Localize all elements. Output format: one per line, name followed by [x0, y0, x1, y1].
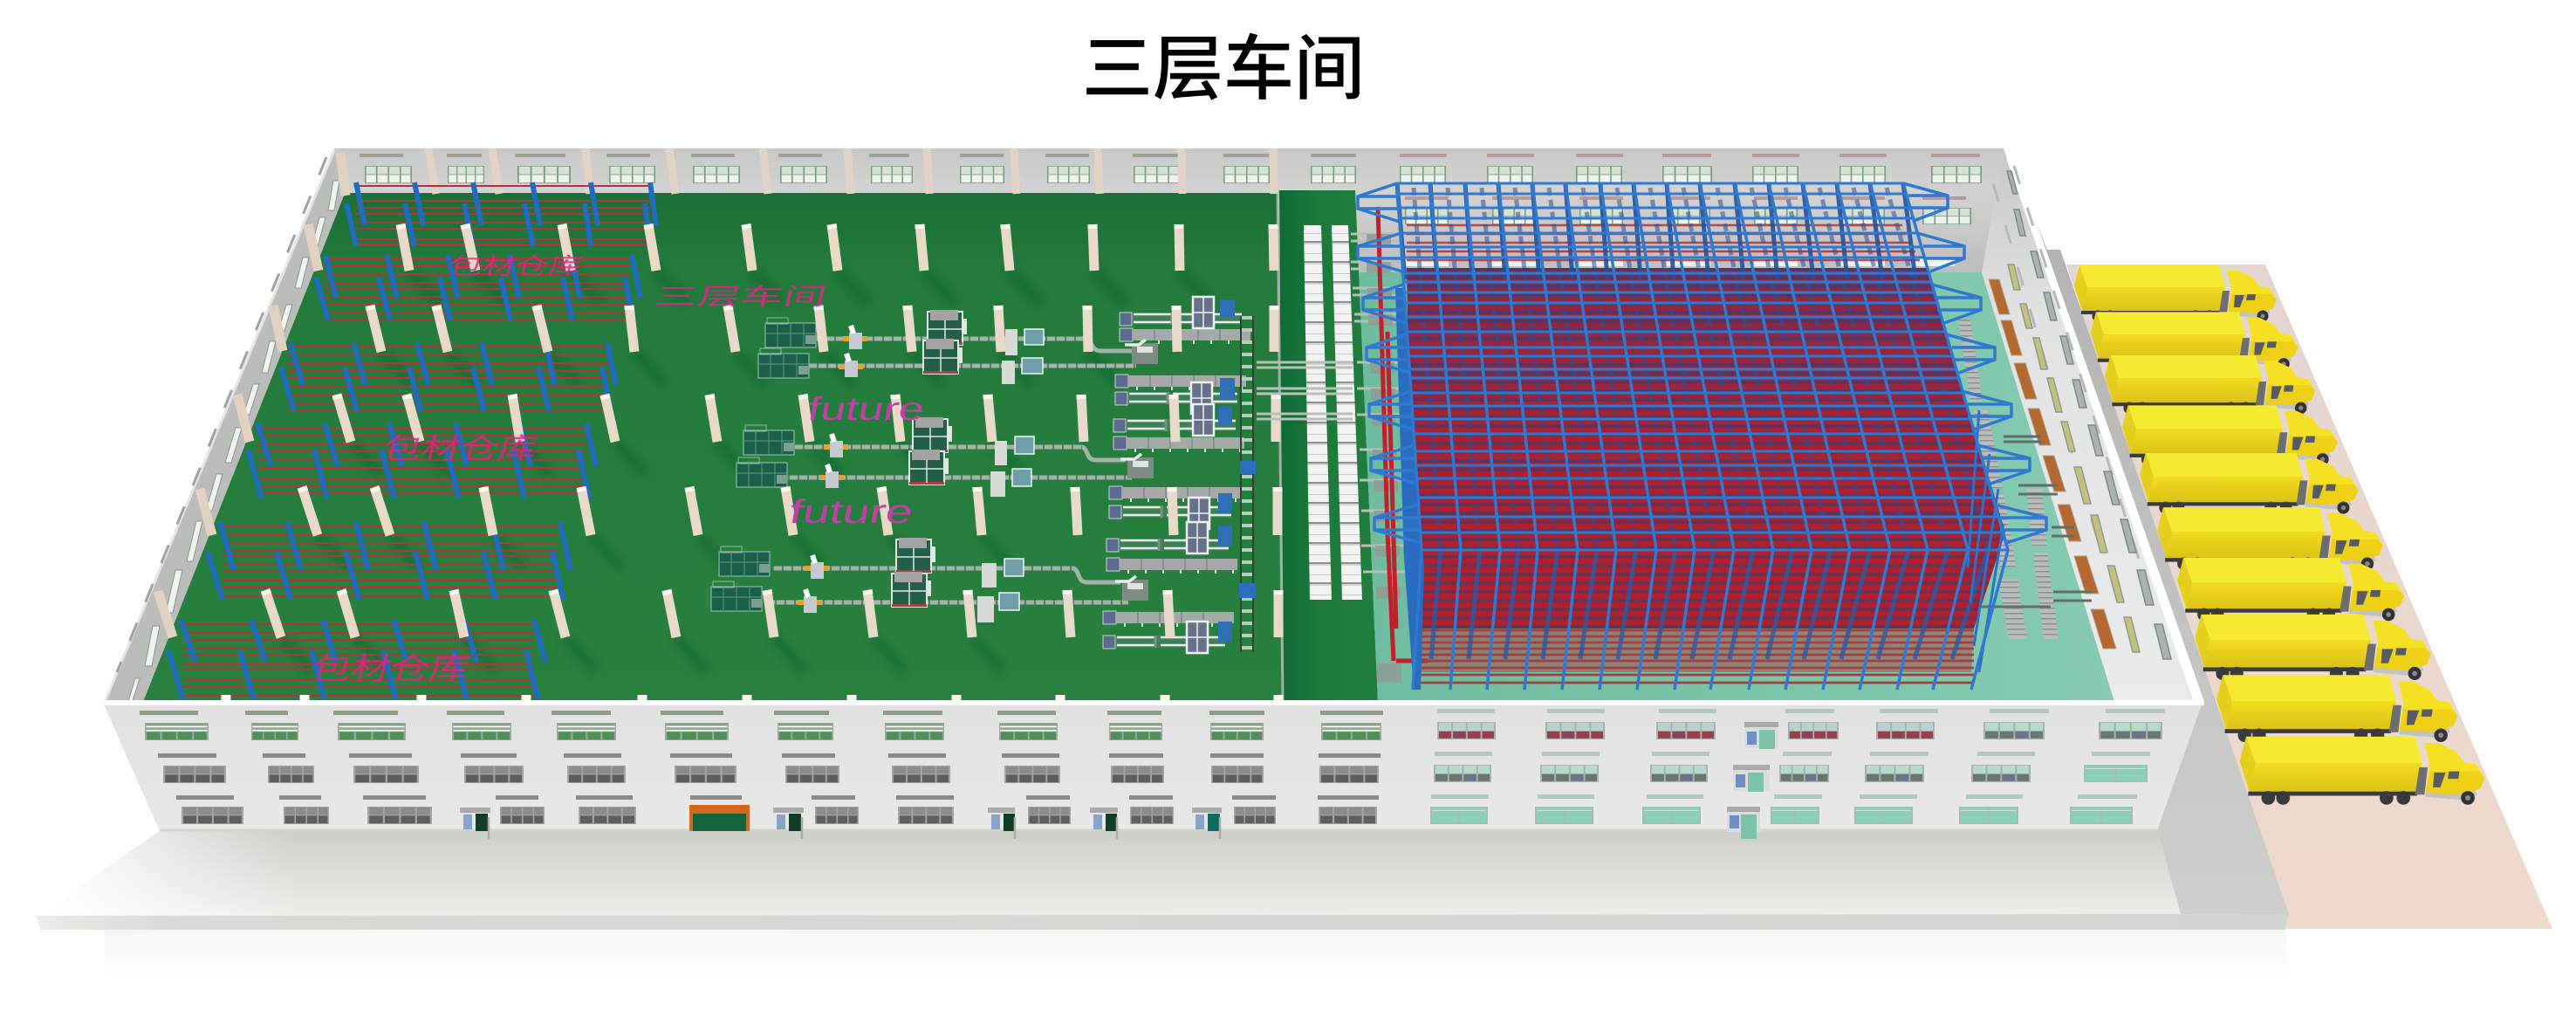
rack group E: [208, 522, 571, 600]
right wall windows (gray column): [2007, 171, 2171, 659]
transom windows: [140, 711, 1383, 715]
entrance doors, stair tower: [1727, 722, 1778, 839]
orange roller door: [689, 805, 750, 831]
truck 4: [2122, 405, 2338, 465]
entrance doors, ground floor: [460, 808, 1222, 839]
right-side teal floor conveyors: [1958, 319, 2092, 639]
rack group A: [346, 182, 656, 246]
floor label: 包材仓库 3: 包材仓库: [308, 651, 473, 686]
rack uprights: [1397, 183, 2008, 690]
left wall: [104, 150, 346, 705]
floor label: 三层车间: 三层车间: [653, 284, 829, 310]
upper floor windows row 1: [145, 722, 2162, 740]
truck 5: [2140, 453, 2359, 514]
right side wing brackets: [1903, 183, 2046, 543]
production line group 3: [711, 522, 1237, 653]
right wall: [1982, 148, 2204, 702]
cross conveyors: [1257, 234, 1414, 572]
upper shelf beams: [1407, 225, 1920, 260]
pillar floor shadows: [281, 271, 1210, 670]
left wall windows: [128, 181, 339, 701]
lower floor windows row 3: [182, 807, 2133, 824]
ground: peach loading yard: [2066, 265, 2552, 929]
rack group C: [281, 343, 616, 411]
red stacker cranes: [1378, 207, 1428, 661]
rack group F: [168, 620, 545, 700]
truck 10: [2240, 737, 2484, 805]
lower shelf beams: [1415, 630, 1974, 683]
rack left end block: [1395, 288, 1424, 690]
rack side uprights: [1968, 410, 2004, 672]
middle floor windows row 2: [163, 765, 2148, 783]
truck 3: [2105, 355, 2315, 414]
truck 8: [2195, 615, 2431, 680]
truck 7: [2177, 558, 2404, 621]
left wall pilasters: [158, 153, 346, 637]
dark inner columns, front face: [1431, 550, 1988, 659]
left side wing brackets: [1358, 183, 1421, 543]
right wall loading doors: [1989, 279, 2116, 649]
divider: [1278, 190, 1283, 701]
production line group 1: [758, 297, 1250, 414]
dark inner columns, upper bays: [1397, 183, 1915, 279]
right wall windows (yellow column): [2008, 265, 2140, 652]
floor label: 包材仓库 1: 包材仓库: [447, 254, 585, 279]
back wall: [334, 148, 2009, 272]
ground: front slab: [26, 825, 2289, 982]
floor label: 包材仓库 2: 包材仓库: [380, 433, 540, 465]
floor label: future 2: future: [786, 493, 916, 531]
production line group 2: [736, 404, 1244, 529]
dark green aisle: [1279, 190, 1378, 701]
rack group B: [316, 255, 641, 320]
teal ground floor: [1359, 272, 2114, 701]
rack group D: [248, 423, 596, 498]
front wall: [104, 702, 2204, 839]
rack top grid cross beams: [1397, 183, 2008, 550]
title: 三层车间: [1082, 31, 1365, 109]
faded lower shelving: [1414, 629, 1974, 672]
truck 2: [2091, 312, 2298, 369]
truck 9: [2216, 675, 2457, 742]
floor label: future 1: future: [805, 390, 928, 427]
ladder conveyor with AGVs: [1239, 316, 1256, 652]
white buffer conveyors: [1257, 225, 1414, 683]
automated high-bay storage rack: [1358, 183, 2046, 690]
truck 6: [2157, 507, 2383, 570]
stack bars running through the bays: [1414, 188, 1988, 550]
beige pillars: [226, 224, 1278, 704]
packaging material racks: [168, 182, 656, 700]
dense shelving: [1407, 268, 2005, 629]
ground: gray side slab: [2007, 148, 2289, 914]
back wall windows: [360, 155, 1982, 266]
back wall pilasters: [428, 148, 1274, 194]
third-floor green floor: [143, 193, 1283, 701]
navy tint over shelving: [1407, 268, 2005, 559]
truck 1: [2074, 265, 2277, 321]
